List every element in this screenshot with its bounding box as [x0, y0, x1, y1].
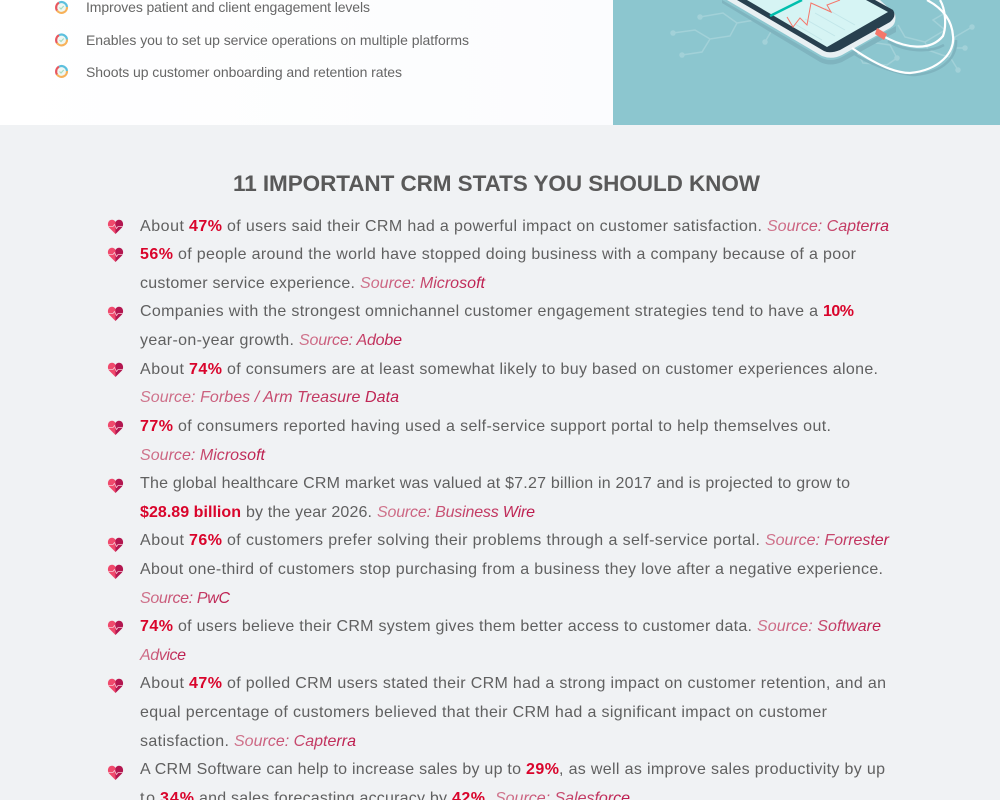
stat 10: equal percentage of customers believed that their CRM had a significant impact on customer	[140, 704, 828, 721]
stat 10: 47%	[189, 675, 222, 692]
stat 6: The global healthcare CRM market was valued at $7.27 billion in 2017 and is projected to grow to	[140, 475, 850, 492]
stat 10: satisfaction.	[140, 733, 229, 750]
stat 10	[108, 675, 886, 750]
stat 6: by the year 2026.	[246, 504, 372, 521]
stat 9: of users believe their CRM system gives them better access to customer data.	[178, 618, 752, 635]
stat 9	[108, 618, 881, 664]
stat 6: Source: Business Wire	[377, 504, 535, 521]
stat 2: 56%	[140, 246, 173, 263]
stat 3: Companies with the strongest omnichannel customer engagement strategies tend to have a	[140, 303, 818, 320]
stat 1	[108, 218, 889, 235]
stat 10: About	[140, 675, 185, 692]
stat 9: Source: Software	[757, 618, 881, 635]
heading: 11 IMPORTANT CRM STATS YOU SHOULD KNOW	[233, 171, 761, 196]
stat 2	[108, 246, 857, 292]
phone screen	[747, 0, 888, 47]
stat 10: of polled CRM users stated their CRM had a strong impact on customer retention, and an	[227, 675, 886, 692]
cable shadow	[853, 40, 956, 75]
stat 2: customer service experience.	[140, 275, 355, 292]
stat 7: Source: Forrester	[765, 532, 890, 549]
stat 9: 74%	[140, 618, 173, 635]
heartbeat line	[787, 0, 840, 27]
screen lines	[795, 8, 855, 40]
stat 7	[108, 532, 890, 552]
stat 2: of people around the world have stopped doing business with a company because of a poor	[178, 246, 857, 263]
panel: phone illustration	[613, 0, 1000, 125]
cables	[852, 0, 953, 73]
screen teal band	[770, 0, 802, 16]
stat 6	[108, 475, 850, 521]
stat 1: of users said their CRM had a powerful impact on customer satisfaction.	[227, 218, 762, 235]
stat 7: About	[140, 532, 185, 549]
stat 11	[108, 761, 885, 800]
phone bezel	[737, 0, 894, 52]
stat 4: About	[140, 361, 185, 378]
stat 8: Source: PwC	[140, 590, 230, 607]
stat 6: $28.89 billion	[140, 504, 241, 521]
phone body	[727, 0, 895, 58]
stat 5: 77%	[140, 418, 173, 435]
stat 7: 76%	[189, 532, 222, 549]
cable plug	[875, 28, 887, 40]
stat 5: Source: Microsoft	[140, 447, 266, 464]
molecule pattern	[671, 13, 974, 72]
benefit item: onboarding and retention: Shoots up customer onboarding and retention rates	[86, 64, 402, 80]
phone shadow	[722, 0, 896, 64]
stat 11: 29%	[526, 761, 559, 778]
stat 4	[108, 361, 878, 406]
stat 4: 74%	[189, 361, 222, 378]
benefit item: multiple platforms: Enables you to set up service operations on multiple platforms	[86, 32, 469, 48]
stat 11: A CRM Software can help to increase sales by up to	[140, 761, 521, 778]
stat 5: of consumers reported having used a self-service support portal to help themselves out.	[178, 418, 831, 435]
stat 8	[108, 561, 883, 607]
stats list	[108, 218, 890, 800]
stat 3: year-on-year growth.	[140, 332, 294, 349]
stat 3	[108, 303, 854, 349]
stat 3: 10%	[823, 303, 854, 320]
stat 7: of customers prefer solving their problems through a self-service portal.	[227, 532, 760, 549]
stat 8: About one-third of customers stop purchasing from a business they love after a negative experience.	[140, 561, 883, 578]
stat 4: Source: Forbes / Arm Treasure Data	[140, 389, 399, 406]
stat 1: About	[140, 218, 185, 235]
stat 4: of consumers are at least somewhat likely to buy based on customer experiences alone.	[227, 361, 878, 378]
stat 11: , as well as improve sales productivity by up	[559, 761, 885, 778]
stat 1: 47%	[189, 218, 222, 235]
stat 3: Source: Adobe	[299, 332, 402, 349]
stat 5	[108, 418, 831, 464]
stat 1: Source: Capterra	[767, 218, 889, 235]
stat 2: Source: Microsoft	[360, 275, 486, 292]
panel: top benefits	[0, 0, 613, 125]
stat 10: Source: Capterra	[234, 733, 356, 750]
stat 9: Advice	[139, 647, 186, 664]
